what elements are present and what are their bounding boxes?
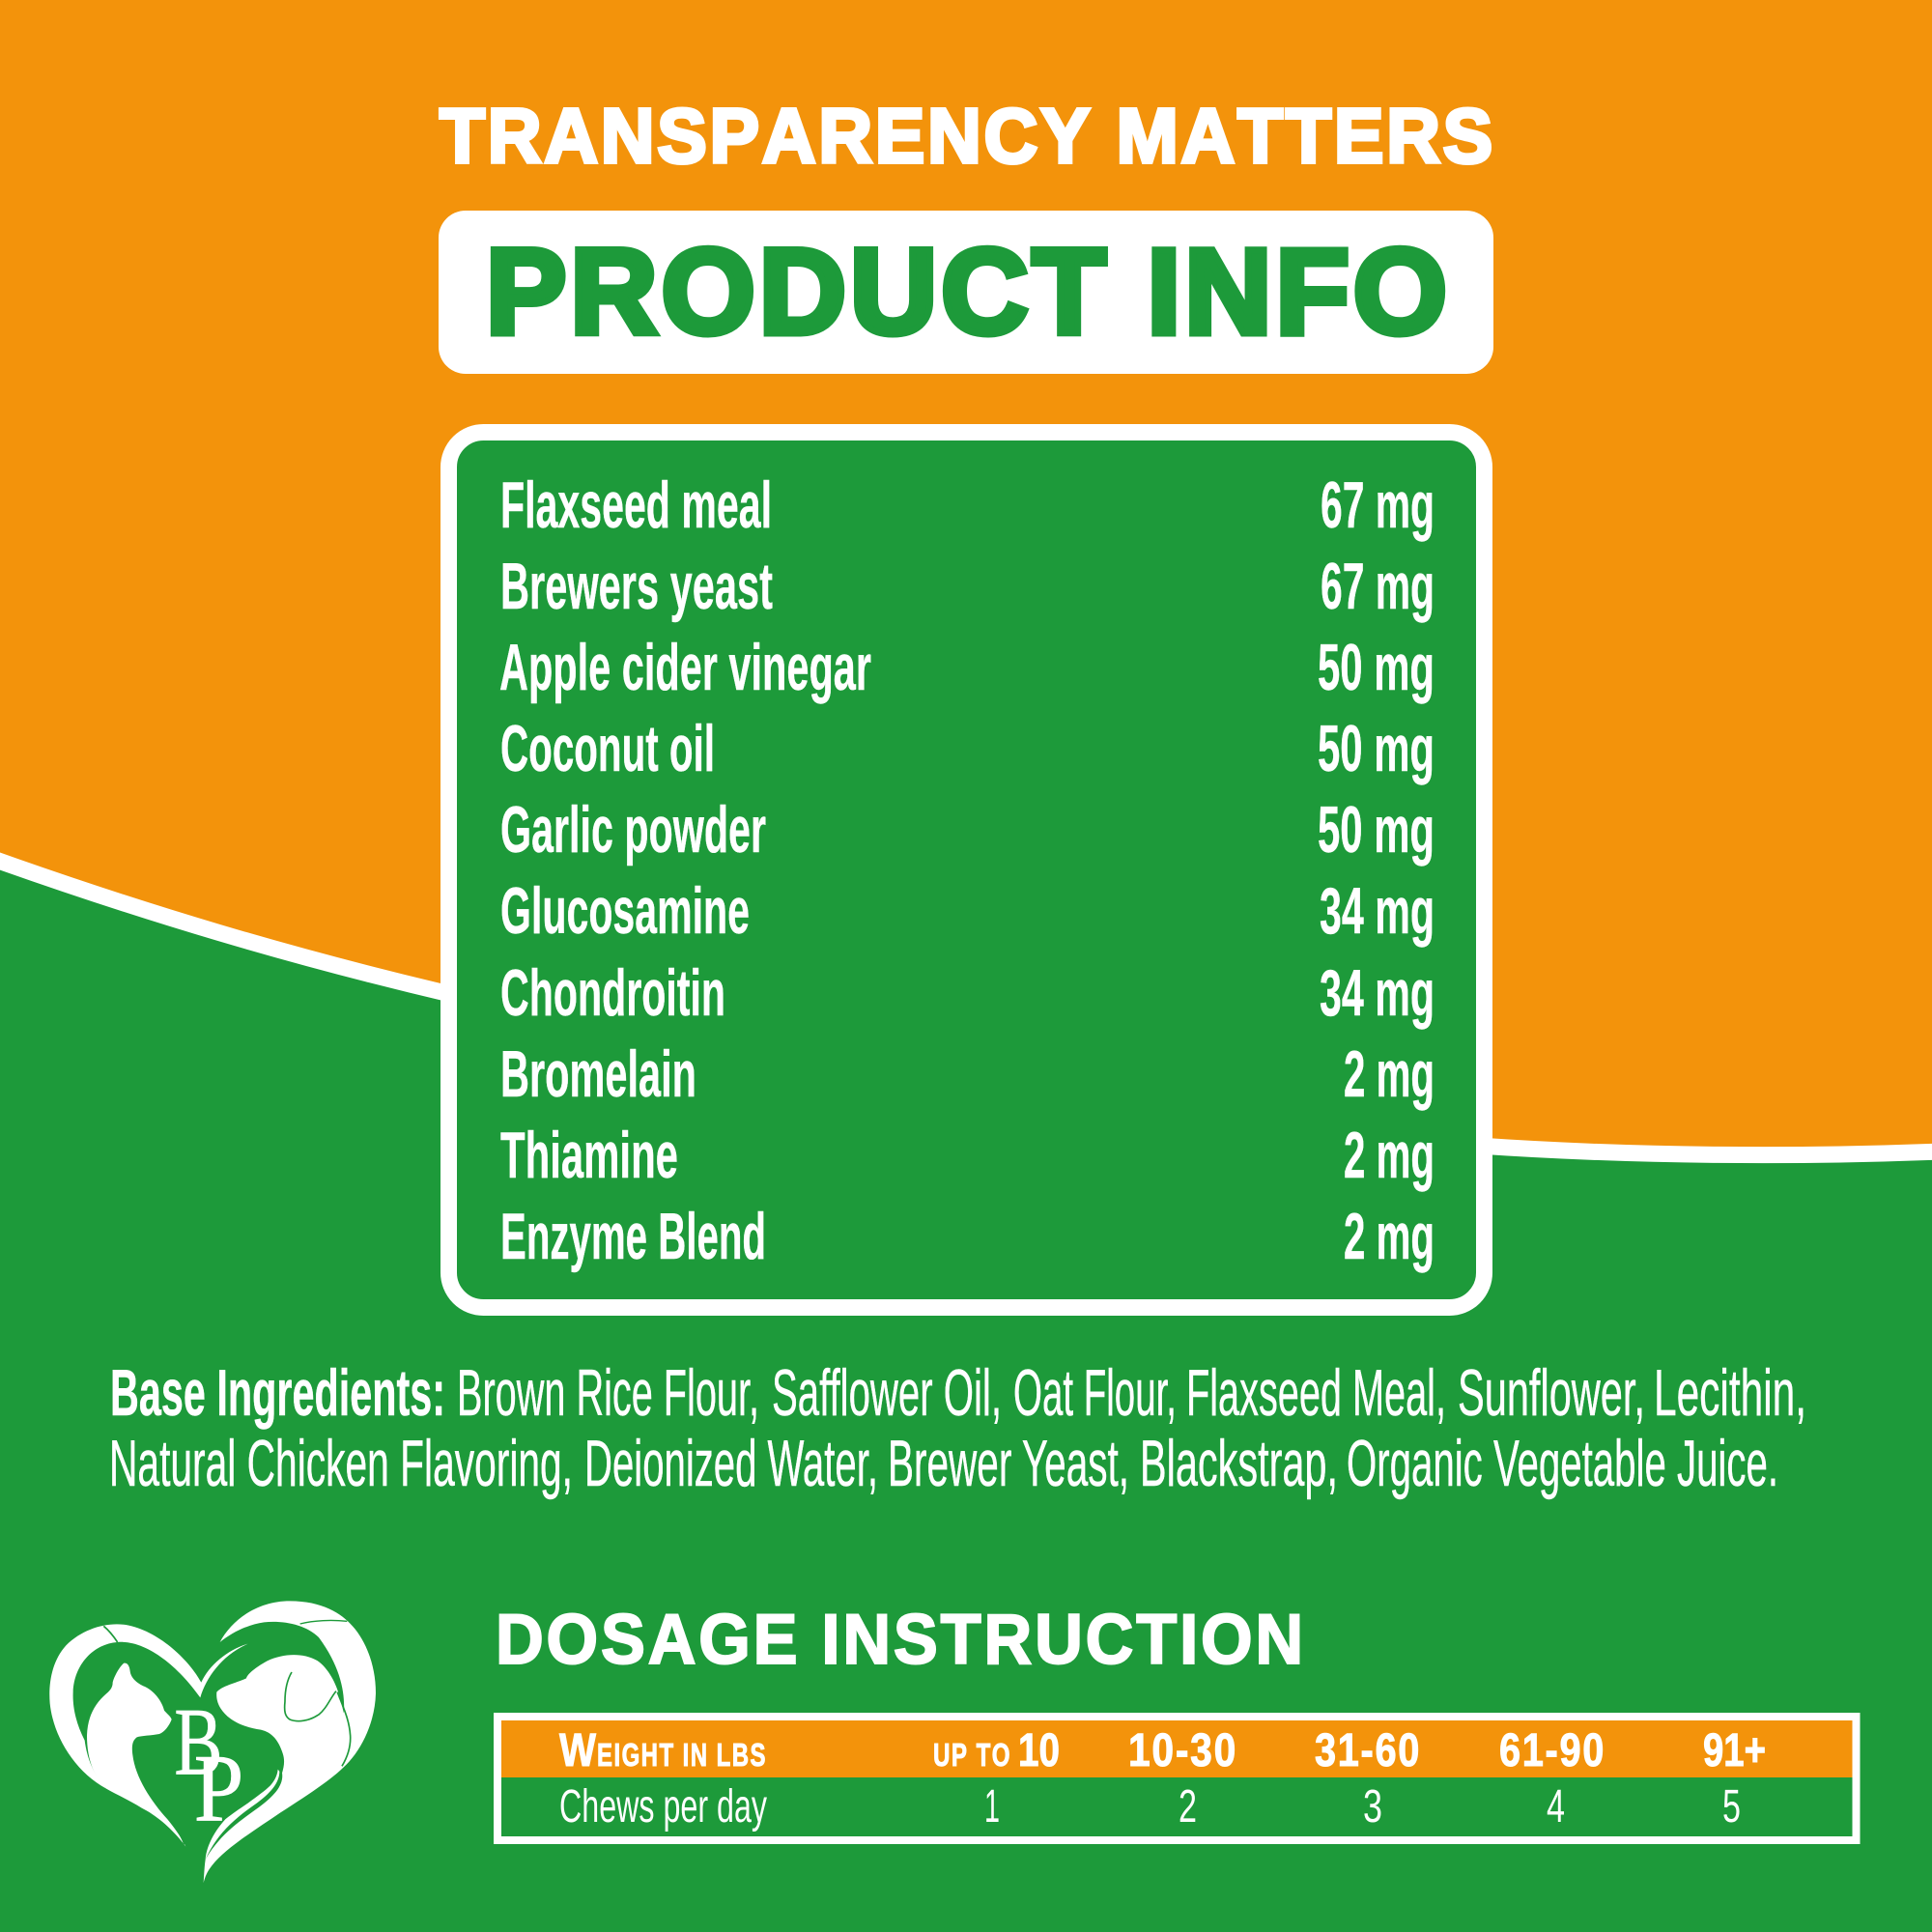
ingredient row: Enzyme Blend: 2 mg	[1344, 1200, 1435, 1273]
ingredient row: Garlic powder: 50 mg	[1318, 793, 1435, 867]
table border	[497, 1717, 1857, 1840]
table header labels: 91+	[1703, 1725, 1766, 1776]
table chews row: 4	[1547, 1781, 1565, 1833]
base ingredients text block: Safflower Oil,	[772, 1356, 1002, 1430]
ingredient row: Apple cider vinegar: Apple cider vinegar	[499, 631, 871, 704]
ingredient row: Thiamine: Thiamine	[500, 1119, 678, 1192]
base ingredients text block: Base Ingredients:	[110, 1356, 445, 1430]
ingredient row: Chondroitin: Chondroitin	[500, 956, 725, 1030]
base ingredients text block: Oat Flour,	[1013, 1356, 1177, 1430]
ingredient row: Brewers yeast: 67 mg	[1321, 550, 1435, 623]
logo: heart with cat and dog	[49, 1601, 376, 1883]
table chews row: 1	[984, 1781, 1000, 1833]
logo cat silhouette	[87, 1663, 185, 1847]
table chews row	[559, 1781, 1741, 1833]
ingredient row: Coconut oil: Coconut oil	[500, 712, 715, 785]
table header labels: 31-60	[1315, 1725, 1421, 1776]
ingredient row: Flaxseed meal	[500, 469, 1435, 542]
base ingredients text block: Natural Chicken Flavoring,	[109, 1427, 573, 1500]
table header labels	[559, 1725, 1766, 1776]
base ingredients text block: Flaxseed Meal,	[1186, 1356, 1446, 1430]
base ingredients text block: Blackstrap,	[1140, 1427, 1338, 1500]
ingredient row: Apple cider vinegar: 50 mg	[1318, 631, 1435, 704]
logo cat leaf vein	[144, 1773, 185, 1844]
ingredient row: Chondroitin: 34 mg	[1320, 956, 1435, 1030]
ingredient row: Enzyme Blend: Enzyme Blend	[500, 1200, 766, 1273]
ingredient row: Brewers yeast: Brewers yeast	[500, 550, 773, 623]
table header labels: UP TO	[933, 1737, 1011, 1773]
logo letter P: P	[194, 1735, 243, 1842]
table header labels: EIGHT IN LBS	[597, 1737, 767, 1773]
ingredient row: Thiamine	[500, 1119, 1435, 1192]
table chews row: Chews per day	[559, 1781, 767, 1833]
ingredient row: Garlic powder	[500, 793, 1435, 867]
table header labels: W	[559, 1725, 597, 1776]
ingredient row: Bromelain	[500, 1037, 1435, 1111]
logo left arc vein	[103, 1626, 118, 1642]
logo band vein	[300, 1620, 347, 1624]
base ingredients text block: Brewer Yeast,	[888, 1427, 1129, 1500]
white wave line right	[1478, 1146, 1932, 1155]
ingredient row: Glucosamine	[500, 874, 1435, 948]
table header labels: 10	[1018, 1725, 1060, 1776]
logo left heart arc	[49, 1624, 248, 1789]
panel: ingredients table	[448, 433, 1484, 1308]
dosage table	[497, 1717, 1857, 1840]
ingredient row: Apple cider vinegar	[499, 631, 1435, 704]
table chews row: 5	[1722, 1781, 1741, 1833]
table header band	[501, 1720, 1853, 1777]
ingredient row: Brewers yeast	[500, 550, 1435, 623]
logo dog ear	[285, 1672, 336, 1721]
table header labels: 10-30	[1128, 1725, 1237, 1776]
white wave line left	[0, 858, 454, 995]
logo letter B: B	[174, 1688, 222, 1795]
table header labels: 61-90	[1499, 1725, 1605, 1776]
ingredient row: Coconut oil	[500, 712, 1435, 785]
base ingredients text block: Sunflower,	[1458, 1356, 1645, 1430]
logo dog body edge	[337, 1692, 351, 1766]
title: TRANSPARENCY MATTERS	[440, 93, 1495, 179]
ingredient row: Garlic powder: Garlic powder	[500, 793, 766, 867]
ingredient row: Chondroitin	[500, 956, 1435, 1030]
ingredient row: Flaxseed meal: Flaxseed meal	[500, 469, 772, 542]
ingredient row: Bromelain: Bromelain	[500, 1037, 696, 1111]
ingredient row: Enzyme Blend	[500, 1200, 1435, 1273]
table chews row: 3	[1363, 1781, 1382, 1833]
logo leaf gap	[206, 1770, 282, 1860]
ingredient row: Glucosamine: 34 mg	[1320, 874, 1435, 948]
base ingredients text block: Deionized Water,	[584, 1427, 878, 1500]
table chews row: 2	[1179, 1781, 1197, 1833]
product info badge: PRODUCT INFO	[486, 225, 1451, 359]
base ingredients text block: Lecithin,	[1654, 1356, 1806, 1430]
ingredient row: Thiamine: 2 mg	[1344, 1119, 1435, 1192]
base ingredients text block	[109, 1356, 1806, 1500]
ingredient row: Bromelain: 2 mg	[1344, 1037, 1435, 1111]
orange background top	[0, 0, 1932, 1154]
base ingredients text block: Brown Rice Flour,	[457, 1356, 759, 1430]
ingredient row: Coconut oil: 50 mg	[1318, 712, 1435, 785]
dosage heading: DOSAGE INSTRUCTION	[496, 1601, 1306, 1679]
ingredient row: Flaxseed meal: 67 mg	[1321, 469, 1435, 542]
logo right heart band and sweep	[204, 1601, 376, 1883]
ingredient row: Glucosamine: Glucosamine	[500, 874, 750, 948]
